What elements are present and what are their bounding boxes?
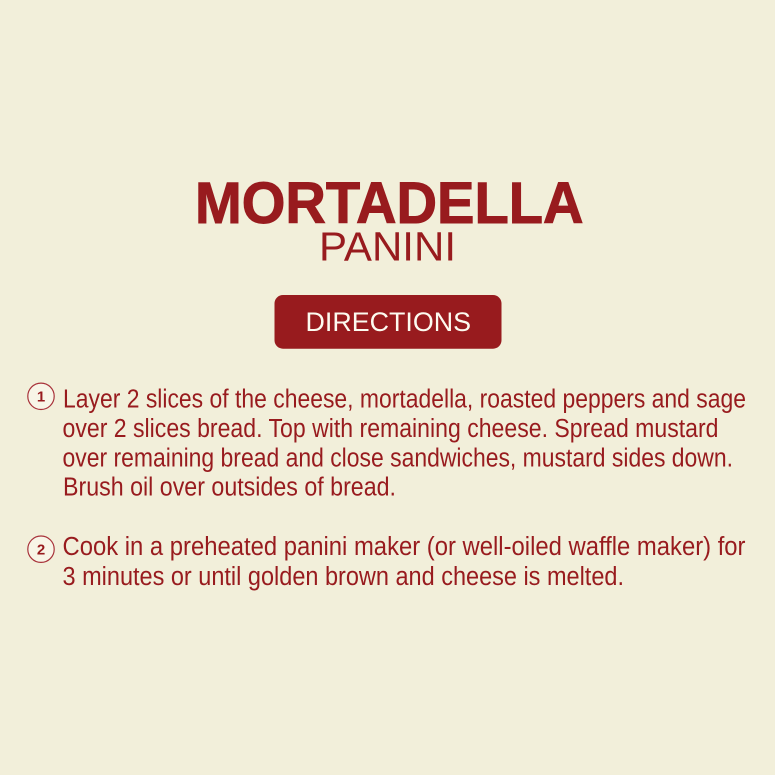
step 1 number: 1	[37, 389, 45, 406]
step 1 text: Brush oil over outsides of bread.	[63, 474, 396, 502]
step 2 text: 3 minutes or until golden brown and cheese is melted.	[62, 563, 624, 591]
step 2 number	[28, 536, 54, 562]
title: MORTADELLA	[195, 171, 584, 236]
step 2	[28, 533, 746, 591]
step 2 number: 2	[37, 541, 45, 558]
directions badge	[274, 295, 502, 349]
step 1	[28, 383, 746, 502]
step 2 text	[62, 533, 746, 591]
subtitle: PANINI	[319, 224, 456, 270]
step 1 text	[62, 386, 746, 502]
step 1 number	[28, 383, 54, 409]
step 2 text: Cook in a preheated panini maker (or well-oiled waffle maker) for	[62, 533, 746, 561]
directions label: DIRECTIONS	[306, 307, 471, 337]
step 1 text: over 2 slices bread. Top with remaining cheese. Spread mustard	[62, 415, 718, 443]
